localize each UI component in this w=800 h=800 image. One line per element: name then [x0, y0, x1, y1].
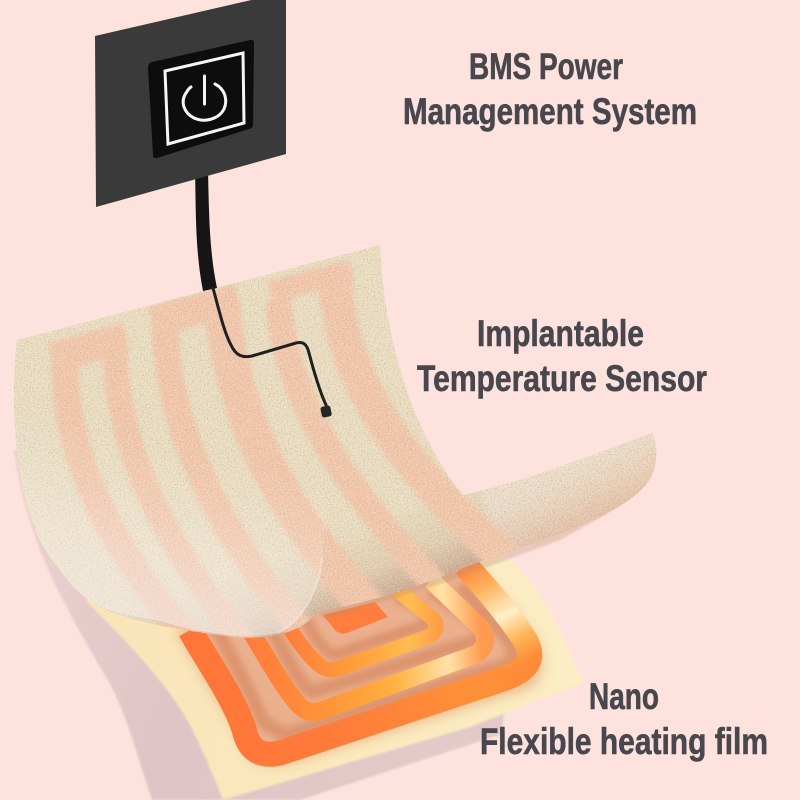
thick cable: [195, 170, 217, 291]
label: BMS: [403, 45, 697, 132]
power bar: [203, 76, 206, 104]
label: film: Nano: [589, 675, 659, 717]
power icon: [183, 76, 226, 120]
button outline: [165, 53, 244, 144]
heating element glow: [175, 555, 542, 765]
heating film layer: [14, 450, 583, 800]
flexible sheet: [14, 245, 656, 638]
power arc: [183, 84, 226, 120]
second coil shadow: [268, 590, 480, 692]
outer coil: [190, 565, 530, 754]
label: sensor: Implantable: [477, 312, 644, 354]
cream film sheet: [85, 540, 583, 800]
lobe lighter fade: [18, 454, 324, 636]
heating coil: [190, 565, 530, 754]
sheet base: [14, 245, 656, 638]
fold edge highlight: [277, 557, 322, 633]
label: film: [480, 675, 768, 762]
sheet underside shadow: [318, 512, 610, 620]
second coil: [250, 580, 485, 712]
button recess: [148, 40, 254, 158]
label: sensor: [417, 312, 707, 399]
sensor tip: [320, 405, 332, 418]
grain light: [14, 246, 656, 638]
third coil shadow: [305, 596, 427, 655]
flap tip: [482, 434, 656, 548]
centre pad: [323, 602, 388, 633]
label: BMS: Management System: [403, 90, 697, 132]
outer coil inner shadow: [215, 585, 513, 735]
thin wire: [213, 288, 326, 405]
heating element base: [190, 565, 527, 750]
sensor cable: [195, 170, 332, 418]
film drop shadow: [14, 450, 505, 800]
resistive serpentine stripes: [52, 270, 530, 650]
label: sensor: Temperature Sensor: [417, 357, 707, 399]
label: BMS: BMS Power: [469, 45, 623, 87]
switch plate: [95, 0, 286, 207]
outer coil highlight: [465, 565, 530, 677]
grain dark: [14, 246, 656, 638]
wall switch: [95, 0, 332, 418]
third coil: [288, 590, 436, 670]
